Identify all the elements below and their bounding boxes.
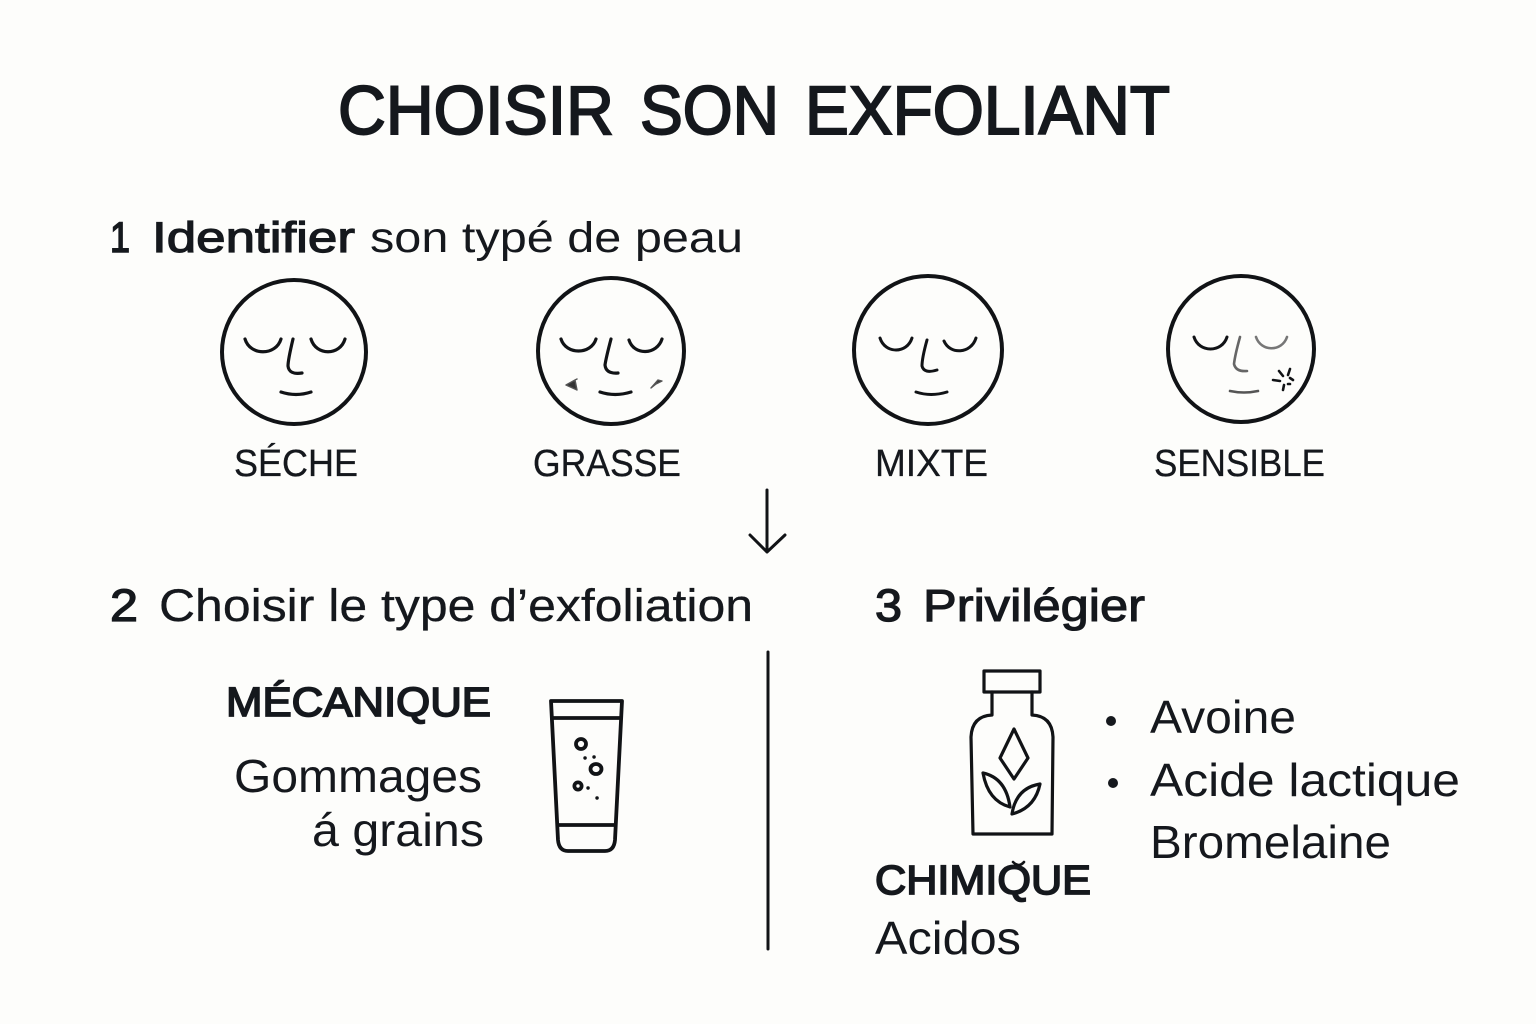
- face: sèche: [222, 280, 366, 424]
- heading: step 2: 2: [110, 580, 138, 631]
- heading: step 1: Identifier: [152, 214, 355, 262]
- list: ingredients: [1106, 691, 1460, 868]
- panel: skin types: [222, 276, 1325, 485]
- panel: chimique: [875, 671, 1460, 964]
- divider: [766, 652, 770, 949]
- list: ingredients: Acide lactique: [1150, 754, 1460, 806]
- title: EXFOLIANT: [805, 72, 1170, 149]
- heading: step 3: 3: [875, 580, 902, 631]
- heading: step 3: Privilégier: [923, 580, 1145, 631]
- heading: step 1: [110, 214, 743, 262]
- text: gommages à grains: Gommages: [234, 750, 482, 802]
- heading: step 2: Choisir le type d’exfoliation: [159, 580, 753, 631]
- icon: bottle: [971, 671, 1053, 834]
- heading: step 1: son typé de peau: [370, 214, 743, 262]
- title: [338, 72, 1170, 149]
- text: acidos: Acidos: [875, 912, 1021, 964]
- list: ingredients: Avoine: [1150, 691, 1296, 743]
- label: sèche: SÉCHE: [234, 442, 358, 485]
- text: gommages à grains: á grains: [312, 804, 484, 856]
- panel: mécanique: [226, 679, 622, 856]
- icon: tube: [551, 701, 622, 851]
- face: grasse: [538, 278, 684, 424]
- heading: chimique: CHIMIQUE: [875, 857, 1091, 903]
- face: sensible: [1168, 276, 1314, 422]
- text: gommages à grains: [234, 750, 484, 856]
- label: mixte: MIXTE: [875, 443, 988, 485]
- title: CHOISIR: [338, 72, 614, 149]
- arrow: down: [750, 490, 785, 552]
- heading: step 1: 1: [110, 214, 130, 262]
- face: mixte: [854, 276, 1002, 424]
- label: sensible: SENSIBLE: [1154, 443, 1325, 485]
- heading: mécanique: MÉCANIQUE: [226, 679, 491, 725]
- title: SON: [640, 72, 779, 149]
- label: grasse: GRASSE: [533, 443, 681, 485]
- list: ingredients: Bromelaine: [1150, 816, 1391, 868]
